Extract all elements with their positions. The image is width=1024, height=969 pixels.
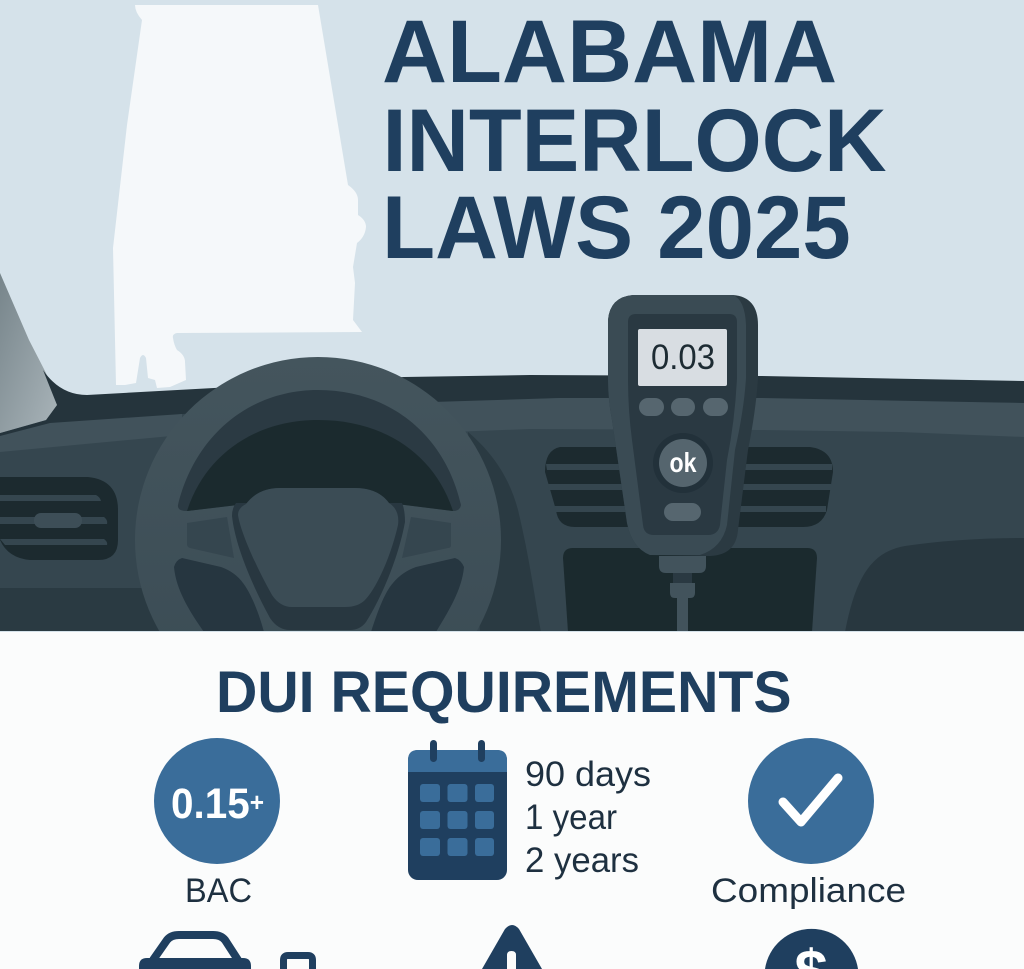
compliance label: Compliance bbox=[711, 872, 906, 910]
car dashboard illustration bbox=[0, 273, 1024, 631]
car roof bbox=[153, 935, 238, 960]
ok button ring bbox=[653, 433, 713, 493]
reading 0.03: 0.03 bbox=[651, 338, 715, 377]
title bbox=[382, 1, 886, 277]
right lower panel bbox=[845, 538, 1024, 632]
icon: warning triangle bbox=[482, 925, 542, 969]
duration list: 1 year bbox=[525, 798, 617, 837]
wheel hub bbox=[238, 488, 398, 607]
lower pill button bbox=[664, 503, 701, 521]
ignition interlock device bbox=[608, 295, 758, 631]
vent housing bbox=[0, 477, 118, 560]
instrument cluster bbox=[187, 420, 453, 511]
left lower spoke gap bbox=[174, 558, 264, 632]
left air vent bbox=[0, 477, 118, 560]
vent slats bbox=[0, 495, 107, 545]
device body bbox=[608, 295, 746, 555]
connector neck bbox=[673, 573, 692, 583]
compliance circle bbox=[748, 738, 874, 864]
steering wheel bbox=[135, 357, 501, 631]
lower dashboard band bbox=[0, 588, 159, 631]
wheel opening bbox=[178, 390, 461, 511]
dashboard top bbox=[0, 370, 1024, 436]
cable bbox=[677, 598, 688, 631]
dashboard main panel bbox=[0, 398, 1024, 632]
left button pad bbox=[187, 517, 234, 558]
BAC circle bbox=[154, 738, 280, 864]
small device bbox=[284, 956, 312, 969]
lower section background bbox=[0, 632, 1024, 969]
vent housing bbox=[545, 447, 833, 527]
Alabama state silhouette bbox=[113, 5, 366, 388]
dashboard highlight band bbox=[0, 398, 1024, 452]
ok label: ok bbox=[670, 447, 697, 478]
title line: Alabama: ALABAMA bbox=[382, 1, 837, 101]
shadow behind wheel bbox=[468, 432, 541, 632]
wheel ring bbox=[135, 357, 501, 631]
calendar icon bbox=[408, 740, 507, 880]
device screen bbox=[638, 329, 727, 386]
calendar header bbox=[408, 750, 507, 772]
vent slats bbox=[546, 464, 832, 512]
BAC value: 0.15 bbox=[171, 780, 255, 828]
duration list: 90 days bbox=[525, 755, 651, 794]
icon: dollar circle bbox=[765, 929, 858, 969]
three small buttons bbox=[639, 398, 728, 416]
calendar day grid bbox=[420, 784, 494, 856]
check mark bbox=[783, 778, 838, 822]
item: BAC bbox=[154, 738, 280, 910]
calendar body bbox=[408, 750, 507, 880]
section heading: DUI REQUIREMENTS bbox=[216, 661, 792, 725]
triangle bbox=[482, 925, 542, 969]
icon: car with device bbox=[139, 935, 312, 969]
BAC value: + bbox=[250, 787, 264, 817]
duration list: 2 years bbox=[525, 841, 639, 880]
right air vent bbox=[545, 447, 833, 527]
centre console bbox=[563, 548, 817, 632]
duration list bbox=[525, 755, 651, 880]
calendar rings bbox=[430, 740, 485, 762]
right button pad bbox=[402, 517, 451, 558]
windshield pillar bbox=[0, 273, 57, 433]
item: compliance bbox=[711, 738, 906, 910]
device shadow side bbox=[608, 295, 758, 556]
vent knob bbox=[34, 513, 82, 528]
ok button bbox=[659, 439, 707, 487]
device connector bbox=[659, 556, 706, 573]
title line: Laws 2025: LAWS 2025 bbox=[382, 177, 851, 277]
connector plug bbox=[670, 583, 695, 598]
BAC label: BAC bbox=[185, 872, 252, 910]
title line: Interlock: INTERLOCK bbox=[382, 91, 886, 190]
exclamation mark bbox=[507, 951, 516, 969]
item: duration bbox=[408, 740, 651, 880]
right lower spoke gap bbox=[371, 558, 464, 632]
car body bbox=[139, 958, 251, 969]
hero background: windshield sky bbox=[0, 0, 1024, 632]
device face bbox=[628, 314, 737, 535]
hub groove bbox=[232, 503, 405, 630]
